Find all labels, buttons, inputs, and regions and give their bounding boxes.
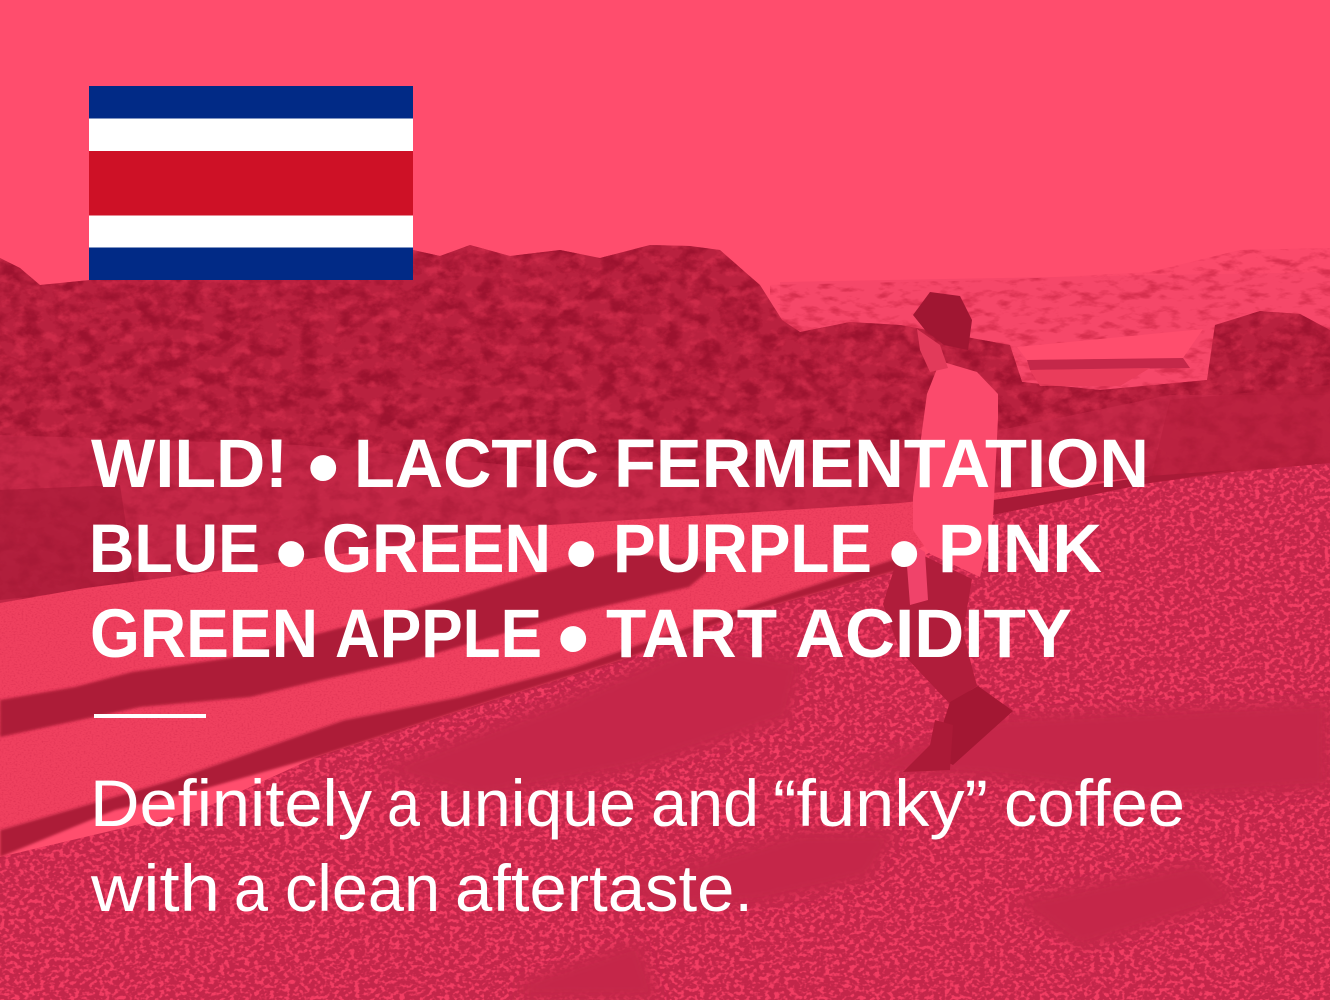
photo background [0, 245, 1330, 1000]
arm [905, 540, 928, 605]
headline line 1: LACTIC [354, 425, 599, 502]
tree line [0, 245, 1330, 603]
upper dark tarp [0, 552, 718, 737]
description line 1: Definitely [90, 766, 372, 840]
description line 2 [90, 851, 753, 925]
description line 2: aftertaste. [455, 851, 753, 925]
flag of Costa Rica [89, 86, 413, 280]
back shoe [903, 720, 953, 772]
rear leg and trousers [883, 550, 977, 704]
thin tarp edge far right [993, 470, 1233, 515]
headline line 3 [90, 589, 1072, 689]
description line 1 [90, 766, 1185, 840]
divider line [94, 714, 206, 718]
hedge rows [0, 252, 1330, 603]
headline line 3: TART [606, 595, 777, 672]
front shoe [933, 686, 1013, 765]
headline line 2: • [276, 504, 307, 604]
headline line 2: • [888, 504, 920, 604]
hair [913, 292, 972, 350]
description line 2: with [90, 851, 220, 925]
smooth tarp patches [373, 640, 1330, 1000]
shirt [913, 361, 998, 577]
headline line 2: PURPLE [613, 510, 872, 587]
description line 1: and [651, 766, 759, 840]
ground with coffee beans [0, 464, 1330, 1000]
headline line 2 [89, 504, 1102, 604]
description line 2: clean [285, 851, 440, 925]
headline line 1: • [308, 418, 339, 518]
headline line 1: WILD! [91, 425, 288, 502]
distant hills [770, 248, 1330, 390]
headline line 3: • [558, 589, 589, 689]
lower dark tarp [0, 557, 900, 857]
headline line 1 [91, 418, 1149, 518]
barn roof and field [1017, 329, 1203, 386]
headline line 1: FERMENTATION [614, 425, 1149, 502]
headline line 2: BLUE [89, 510, 260, 587]
headline line 3: GREEN [90, 595, 318, 672]
face [917, 329, 948, 372]
flavor headline [89, 418, 1149, 689]
person walking [883, 292, 1013, 772]
description line 1: unique [437, 766, 636, 840]
description [90, 766, 1185, 925]
headline line 2: GREEN [322, 510, 551, 587]
headline line 3: ACIDITY [795, 595, 1072, 672]
headline line 3: APPLE [335, 595, 542, 672]
headline line 2: • [566, 504, 597, 604]
description line 2: a [234, 851, 268, 925]
pale road strips [0, 476, 1150, 830]
description line 1: “funky” [773, 766, 988, 840]
headline line 2: PINK [938, 510, 1102, 587]
description line 1: a [387, 766, 420, 840]
description line 1: coffee [1004, 766, 1185, 840]
